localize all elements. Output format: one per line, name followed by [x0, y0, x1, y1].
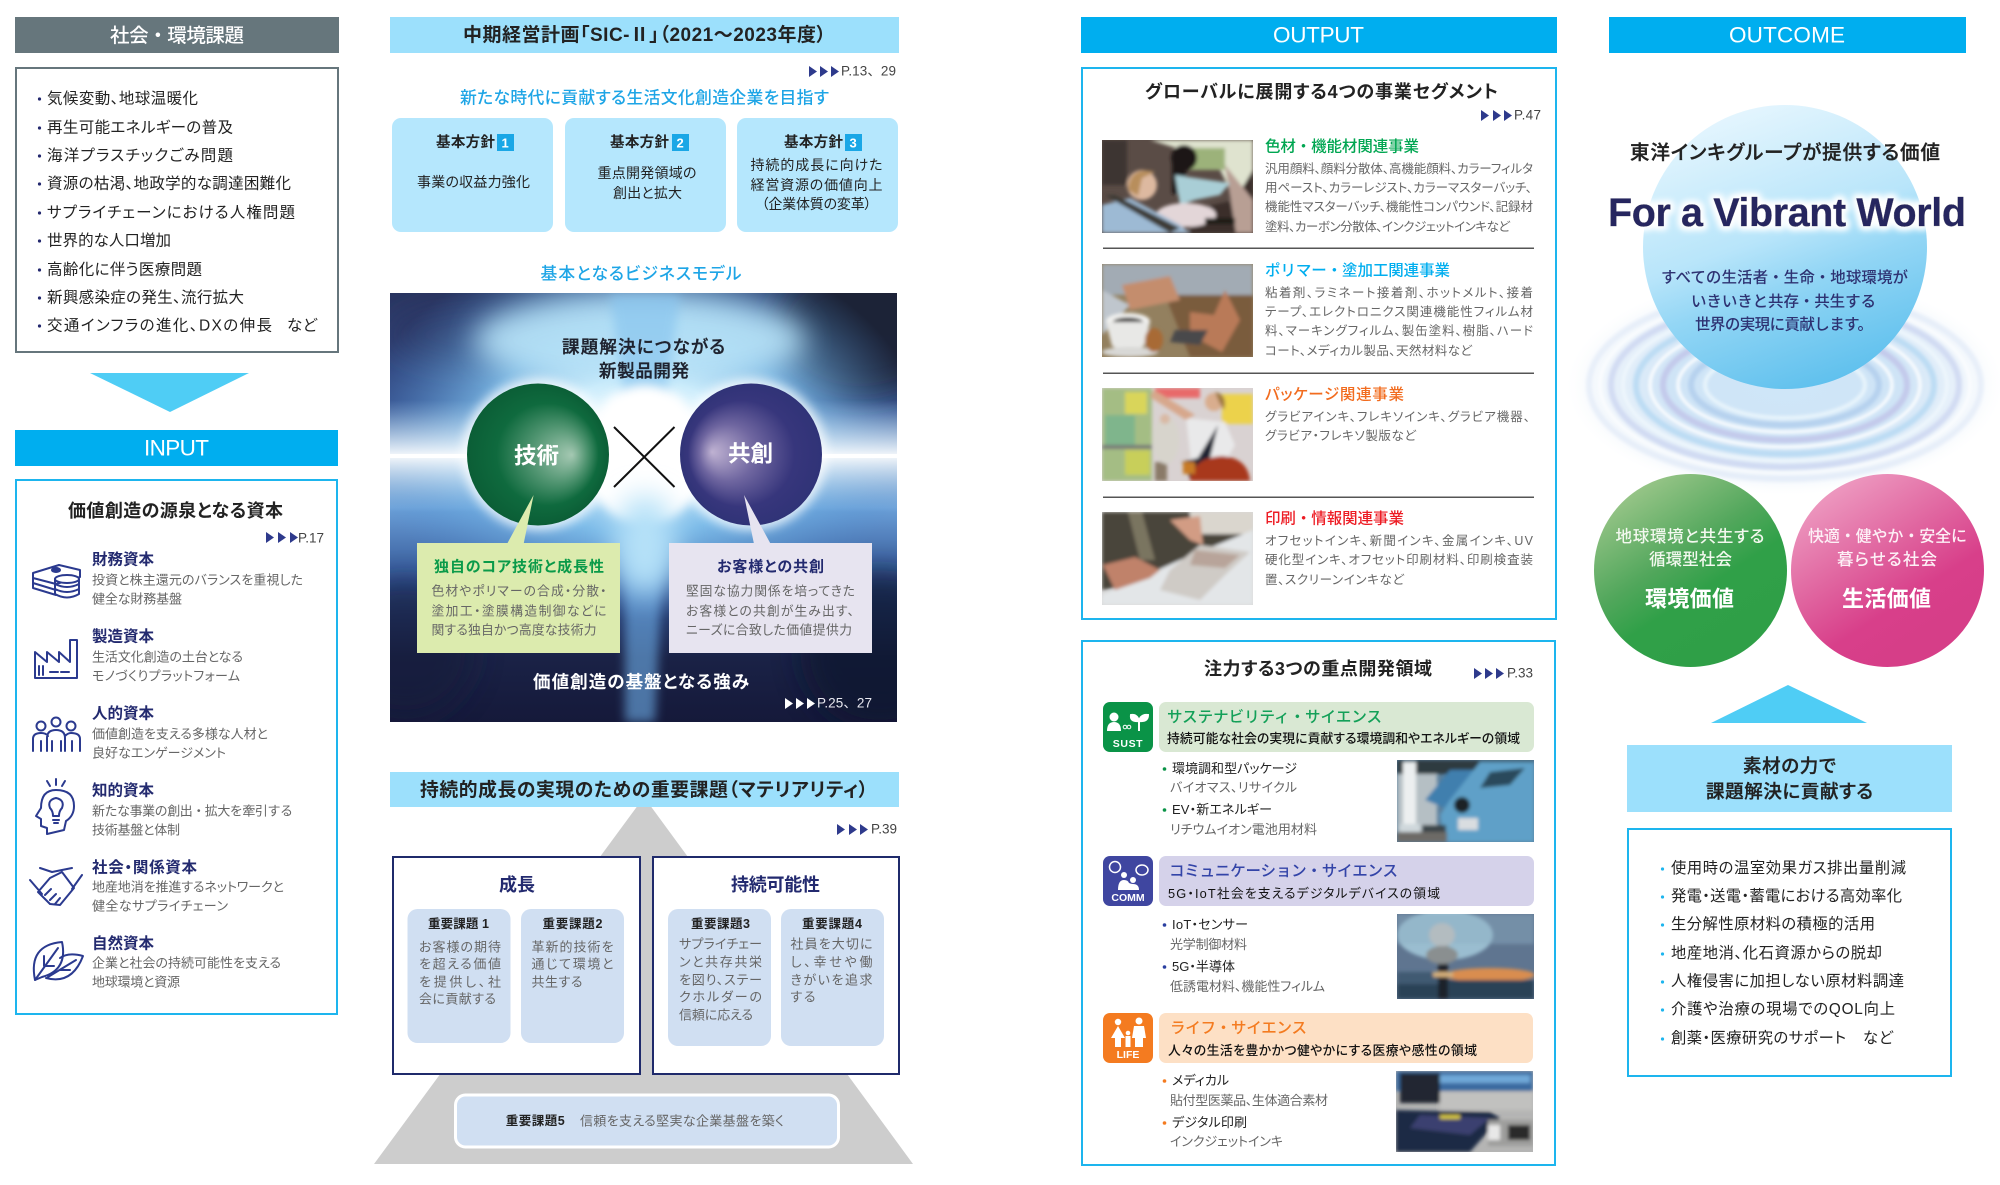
- page ref P.17: P.17: [298, 530, 324, 546]
- card: policy 1: 事業の収益力強化: [417, 174, 530, 190]
- callout: customer co-creation: お客様との共創が生み出す、: [686, 604, 854, 618]
- circle: life value: [1791, 474, 1984, 667]
- text: value statement: 世界の実現に貢献します。: [1695, 316, 1873, 334]
- bar: communication science: [1159, 856, 1534, 906]
- header: materiality: [390, 772, 899, 807]
- card: policy 1: 基本方針: [436, 133, 496, 151]
- callout: core technology: [417, 495, 620, 653]
- sphere: co-creation: [675, 378, 827, 530]
- page ref P.47: [1481, 108, 1541, 122]
- capital: natural: 自然資本: [92, 934, 154, 952]
- capital: financial: 投資と株主還元のバランスを重視した: [92, 572, 303, 588]
- capital: natural: [34, 934, 281, 990]
- card: policy 1: 1: [502, 136, 509, 150]
- header: mid-term plan: [390, 17, 899, 53]
- capital: manufacturing: モノづくりプラットフォーム: [92, 668, 240, 684]
- graphic: water ripples: [1567, 275, 2000, 495]
- list: sustainability: バイオマス、リサイクル: [1170, 780, 1297, 795]
- list: sustainability: リチウムイオン電池用材料: [1170, 822, 1317, 837]
- header: OUTPUT: OUTPUT: [1273, 22, 1364, 48]
- callout: core technology: 関する独自かつ高度な技術力: [432, 622, 596, 638]
- card: policy 1: [392, 118, 553, 232]
- segment: printing: [1265, 510, 1534, 587]
- segment: printing: オフセットインキ、新聞インキ、金属インキ、UV: [1265, 534, 1534, 548]
- bar: life science: ライフ・サイエンス: [1170, 1020, 1307, 1037]
- card: material issue 2: [521, 909, 624, 1043]
- card: policy 3: 3: [850, 136, 857, 150]
- bar: communication science: コミュニケーション・サイエンス: [1169, 862, 1398, 880]
- capital: intellectual: 知的資本: [92, 780, 154, 800]
- header: mid-term plan: 中期経営計画「SIC-Ⅱ」（2021～2023年度）: [463, 23, 826, 46]
- card: material issue 4: し、幸せや働: [790, 954, 872, 970]
- sphere: technology: [462, 378, 614, 530]
- photo: supermarket shopper: [1102, 388, 1253, 481]
- text: new product development: 新製品開発: [599, 361, 690, 381]
- card: policy 3: 持続的成長に向けた: [750, 157, 882, 173]
- page ref P.17: [266, 530, 324, 546]
- panel: contribution list: など: [1863, 1030, 1894, 1047]
- capital: social: 地産地消を推進するネットワークと: [92, 880, 284, 894]
- page ref P.13、29: [809, 64, 896, 78]
- photo: 5G tower: [1397, 910, 1535, 999]
- card: material issue 3: サプライチェー: [679, 936, 762, 952]
- page ref P.13、29: P.13、29: [841, 64, 896, 78]
- segment: polymers: [1265, 262, 1533, 358]
- segment: printing: 置、スクリーンインキなど: [1265, 573, 1405, 587]
- panel: contribution list: 人権侵害に加担しない原材料調達: [1671, 973, 1904, 990]
- card: material issue 5: [456, 1095, 838, 1147]
- segment: packaging: [1265, 386, 1530, 443]
- header: contribution: 素材の力で: [1743, 756, 1836, 776]
- card: material issue 4: [781, 909, 884, 1046]
- page ref P.33: P.33: [1507, 666, 1533, 680]
- panel: sustainability: 持続可能性: [731, 874, 820, 895]
- callout: core technology: 独自のコア技術と成長性: [434, 558, 604, 576]
- capital: manufacturing: 製造資本: [92, 626, 154, 646]
- panel: social and environmental issues: 高齢化に伴う医療問題: [47, 260, 202, 278]
- photo: hands with phone and coffee: [1102, 264, 1253, 357]
- header: INPUT: [15, 430, 338, 466]
- segment: polymers: 料、マーキングフィルム、製缶塗料、樹脂、ハード: [1265, 323, 1533, 338]
- callout: customer co-creation: お客様との共創: [717, 558, 824, 576]
- callout: customer co-creation: ニーズに合致した価値提供力: [686, 622, 852, 638]
- panel: growth: 成長: [499, 874, 535, 895]
- capital: human: 価値創造を支える多様な人材と: [92, 726, 268, 742]
- text: value provided: 東洋インキグループが提供する価値: [1630, 142, 1940, 164]
- panel: contribution list: 使用時の温室効果ガス排出量削減: [1671, 860, 1906, 877]
- panel: social and environmental issues: 海洋プラスチックごみ問題: [47, 146, 233, 164]
- capital: human: [33, 704, 268, 760]
- card: material issue 4: する: [790, 990, 816, 1004]
- card: material issue 5: 信頼を支える堅実な企業基盤を築く: [580, 1114, 784, 1128]
- icon: SUST: SUST: [1113, 738, 1143, 750]
- header: 社会・環境課題: [15, 17, 339, 53]
- list: life: インクジェットインキ: [1170, 1134, 1283, 1149]
- list: communication: IoT・センサー: [1172, 917, 1248, 932]
- panel: social and environmental issues: など: [287, 316, 318, 334]
- callout: core technology: 塗加工・塗膜構造制御などに: [432, 604, 606, 618]
- card: material issue 1: 重要課題 1: [428, 916, 489, 931]
- icon: COMM: COMM: [1111, 892, 1145, 904]
- card: policy 2: [565, 118, 726, 232]
- segment: polymers: ポリマー・塗加工関連事業: [1265, 262, 1450, 280]
- segment: printing: 印刷・情報関連事業: [1265, 510, 1404, 528]
- circle: life value: 生活価値: [1842, 586, 1931, 612]
- bar: sustainability science: サステナビリティ・サイエンス: [1167, 708, 1382, 726]
- capital: manufacturing: 生活文化創造の土台となる: [92, 650, 243, 664]
- panel: social and environmental issues: [16, 68, 338, 352]
- card: policy 3: 経営資源の価値向上: [750, 177, 882, 193]
- list: communication: 低誘電材料、機能性フィルム: [1170, 979, 1325, 994]
- callout: customer co-creation: [669, 495, 872, 653]
- icon: SUST: [1103, 702, 1153, 752]
- card: material issue 3: [668, 909, 771, 1046]
- icon: LIFE: LIFE: [1117, 1049, 1139, 1061]
- card: material issue 1: 会に貢献する: [419, 992, 496, 1006]
- capital: social: 社会・関係資本: [92, 858, 197, 876]
- segment: packaging: グラビア・フレキソ製版など: [1265, 429, 1417, 443]
- card: policy 2: 創出と拡大: [613, 185, 682, 201]
- circle: environmental value: 地球環境と共生する: [1616, 527, 1764, 546]
- segment: colorants: [1265, 136, 1533, 234]
- card: material issue 4: 重要課題4: [802, 916, 862, 931]
- panel: contribution list: 創薬・医療研究のサポート: [1671, 1030, 1846, 1047]
- card: policy 3: （企業体質の変革）: [762, 196, 872, 212]
- segment: packaging: グラビアインキ、フレキソインキ、グラビア機器、: [1265, 410, 1530, 424]
- card: material issue 3: ンと共存共栄: [679, 954, 762, 970]
- card: policy 3: [737, 118, 898, 232]
- capital: social: [30, 858, 284, 914]
- text: strengths: 価値創造の基盤となる強み: [533, 672, 749, 692]
- panel: capitals: [16, 480, 337, 1014]
- card: material issue 3: クホルダーの: [679, 990, 762, 1004]
- background light burst: [390, 293, 897, 722]
- page ref P.47: P.47: [1514, 108, 1541, 122]
- page ref P.39: P.39: [871, 822, 897, 836]
- header: 社会・環境課題: 社会・環境課題: [110, 25, 244, 47]
- bar: life science: [1159, 1013, 1533, 1063]
- capital: financial: [33, 550, 303, 606]
- circle: environmental value: 環境価値: [1645, 586, 1734, 612]
- list: life: メディカル: [1172, 1073, 1229, 1088]
- circle: life value: 暮らせる社会: [1837, 550, 1938, 569]
- panel: business model diagram: [390, 293, 897, 722]
- list: sustainability: [1163, 761, 1317, 837]
- capital: social: 健全なサプライチェーン: [92, 898, 228, 914]
- panel: contribution list: 生分解性原材料の積極的活用: [1671, 916, 1875, 933]
- card: material issue 4: 社員を大切に: [790, 936, 872, 952]
- card: material issue 4: きがいを追求: [790, 972, 872, 988]
- header: OUTCOME: [1609, 17, 1966, 53]
- segment: colorants: 色材・機能材関連事業: [1265, 136, 1419, 156]
- list: life: 貼付型医薬品、生体適合素材: [1170, 1093, 1328, 1108]
- heading: segments: グローバルに展開する4つの事業セグメント: [1145, 81, 1498, 102]
- capital: financial: 財務資本: [92, 550, 154, 568]
- text: value statement: すべての生活者・生命・地球環境が: [1661, 268, 1908, 286]
- cross symbol: [614, 427, 674, 487]
- card: material issue 1: お客様の期待: [419, 940, 501, 954]
- arrow: up: [1711, 685, 1867, 723]
- text: new product development: [562, 337, 725, 381]
- panel: social and environmental issues: 新興感染症の発生、流行拡大: [47, 288, 244, 306]
- list: communication: 5G・半導体: [1172, 959, 1235, 974]
- page ref P.25、27: P.25、27: [817, 696, 872, 710]
- callout: core technology: 色材やポリマーの合成・分散・: [432, 584, 606, 598]
- segment: printing: 硬化型インキ、オフセット印刷材料、印刷検査装: [1265, 553, 1533, 567]
- capital: intellectual: 新たな事業の創出・拡大を牽引する: [92, 804, 293, 818]
- capital: financial: 健全な財務基盤: [92, 592, 182, 606]
- list: sustainability: EV・新エネルギー: [1172, 802, 1272, 817]
- text: new product development: 課題解決につながる: [562, 337, 725, 357]
- panel: social and environmental issues: サプライチェーンにおける人権問題: [47, 204, 295, 222]
- segment: polymers: テープ、エレクトロニクス関連機能性フィルム材: [1265, 304, 1533, 319]
- list: sustainability: 環境調和型パッケージ: [1172, 761, 1297, 776]
- segment: packaging: パッケージ関連事業: [1265, 386, 1404, 404]
- card: material issue 3: 重要課題3: [691, 916, 750, 931]
- page ref P.33: [1474, 666, 1533, 680]
- list: life: [1163, 1073, 1328, 1149]
- subheading: business model: 基本となるビジネスモデル: [540, 264, 742, 284]
- page ref P.25、27: [785, 696, 872, 710]
- panel: growth: [393, 857, 640, 1074]
- panel: contribution list: [1628, 829, 1951, 1076]
- panel: business segments: [1082, 68, 1556, 619]
- icon: LIFE: [1103, 1013, 1153, 1063]
- card: material issue 5: 重要課題5: [506, 1113, 565, 1128]
- panel: social and environmental issues: 交通インフラの進化、DXの伸長: [47, 316, 272, 334]
- capital: manufacturing: [35, 626, 243, 684]
- circle: environmental value: 循環型社会: [1649, 550, 1732, 569]
- sphere: co-creation: 共創: [728, 442, 773, 466]
- panel: social and environmental issues: 気候変動、地球温暖化: [47, 90, 198, 108]
- header: contribution: [1627, 745, 1952, 812]
- photo: family in car: [1102, 140, 1253, 233]
- list: communication: [1163, 917, 1325, 994]
- panel: focus development areas: [1082, 641, 1555, 1165]
- header: OUTPUT: [1081, 17, 1557, 53]
- sphere: value statement: [1643, 105, 1927, 389]
- sphere: technology: 技術: [514, 444, 559, 468]
- list: life: デジタル印刷: [1172, 1115, 1247, 1130]
- card: material issue 2: 共生する: [532, 974, 582, 990]
- card: material issue 2: 通じて環境と: [532, 956, 614, 972]
- text: value statement: いきいきと共存・共生する: [1691, 292, 1876, 310]
- card: policy 2: 2: [676, 136, 684, 150]
- pyramid background: [374, 797, 913, 1164]
- segment: polymers: 粘着剤、ラミネート接着剤、ホットメルト、接着: [1265, 285, 1533, 300]
- heading: focus areas: 注力する3つの重点開発領域: [1204, 659, 1432, 679]
- list: communication: 光学制御材料: [1170, 937, 1247, 952]
- segment: colorants: 汎用顔料、顔料分散体、高機能顔料、カラーフィルタ: [1265, 161, 1533, 176]
- capital: intellectual: 技術基盤と体制: [92, 822, 180, 838]
- capital: intellectual: [36, 779, 293, 838]
- heading: capitals: 価値創造の源泉となる資本: [68, 501, 283, 521]
- header: materiality: 持続的成長の実現のための重要課題（マテリアリティ）: [420, 778, 868, 800]
- card: material issue 3: 信頼に応える: [679, 1008, 753, 1022]
- subheading: vision: 新たな時代に貢献する生活文化創造企業を目指す: [460, 88, 829, 108]
- header: INPUT: INPUT: [144, 436, 209, 460]
- slogan: For a Vibrant World: For a Vibrant World: [1608, 191, 1966, 235]
- segment: colorants: 塗料、カーボン分散体、インクジェットインキなど: [1265, 219, 1511, 234]
- photo: digital printer: [1396, 1071, 1533, 1152]
- bar: sustainability science: [1159, 702, 1534, 752]
- card: policy 3: 基本方針: [784, 133, 844, 151]
- card: material issue 1: [408, 909, 510, 1043]
- arrow: down: [90, 373, 249, 412]
- panel: social and environmental issues: 世界的な人口増加: [47, 232, 171, 250]
- capital: natural: 地球環境と資源: [92, 974, 180, 990]
- card: material issue 2: 重要課題2: [542, 916, 603, 931]
- bar: communication science: 5G・IoT社会を支えるデジタルデバイスの領域: [1168, 886, 1440, 901]
- header: OUTCOME: OUTCOME: [1729, 22, 1845, 48]
- panel: contribution list: 発電・送電・蓄電における高効率化: [1671, 888, 1902, 905]
- capital: human: 良好なエンゲージメント: [92, 746, 226, 760]
- circle: life value: 快適・健やか・安全に: [1808, 528, 1967, 546]
- panel: sustainability: [653, 857, 899, 1074]
- photo: electric car charging: [1397, 760, 1534, 842]
- card: policy 2: 基本方針: [610, 133, 670, 151]
- card: material issue 3: を図り、ステー: [679, 972, 762, 988]
- segment: polymers: コート、メディカル製品、天然材料など: [1265, 343, 1473, 358]
- panel: contribution list: 地産地消、化石資源からの脱却: [1671, 945, 1882, 962]
- panel: social and environmental issues: 再生可能エネルギーの普及: [47, 118, 233, 136]
- capital: human: 人的資本: [92, 704, 154, 722]
- card: policy 2: 重点開発領域の: [598, 165, 696, 181]
- segment: colorants: 用ペースト、カラーレジスト、カラーマスターバッチ、: [1265, 181, 1532, 195]
- text: value statement: [1661, 268, 1908, 334]
- card: material issue 1: を超える価値: [419, 956, 501, 972]
- header: contribution: 課題解決に貢献する: [1706, 781, 1873, 802]
- bar: life science: 人々の生活を豊かかつ健やかにする医療や感性の領域: [1168, 1043, 1477, 1058]
- callout: customer co-creation: 堅固な協力関係を培ってきた: [686, 584, 855, 598]
- card: material issue 1: を提供し、社: [419, 974, 501, 990]
- bar: sustainability science: 持続可能な社会の実現に貢献する環境調和やエネルギーの領域: [1167, 731, 1520, 746]
- circle: environmental value: [1594, 474, 1787, 667]
- segment: colorants: 機能性マスターバッチ、機能性コンパウンド、記録材: [1265, 199, 1533, 214]
- icon: COMM: [1103, 856, 1153, 906]
- photo: printed magazine: [1102, 512, 1253, 605]
- panel: social and environmental issues: 資源の枯渇、地政学的な調達困難化: [47, 174, 291, 192]
- capital: natural: 企業と社会の持続可能性を支える: [92, 956, 281, 970]
- page ref P.39: [837, 822, 897, 836]
- panel: contribution list: 介護や治療の現場でのQOL向上: [1671, 1001, 1895, 1018]
- card: material issue 2: 革新的技術を: [532, 940, 614, 954]
